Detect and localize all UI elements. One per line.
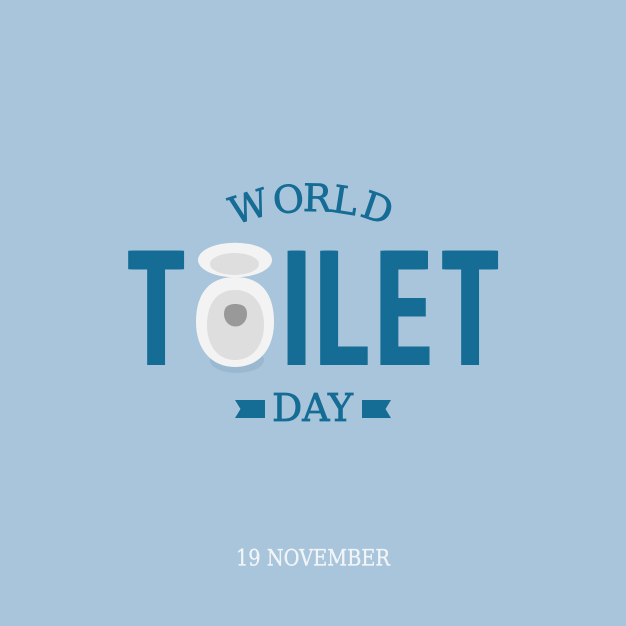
letter I: I — [285, 216, 308, 401]
letter T: T — [130, 216, 182, 401]
icon: right ribbon — [362, 400, 391, 418]
letter T: T — [444, 216, 496, 401]
heading: TOILET wordmark — [128, 216, 498, 401]
icon: left ribbon — [235, 400, 265, 418]
heading: WORLD arched text: WORLD — [224, 176, 399, 234]
letter L: L — [318, 216, 367, 401]
text: DAY: DAY — [272, 386, 354, 430]
date: 19 November: 19 NOVEMBER — [236, 546, 391, 572]
letter E: E — [379, 216, 428, 401]
